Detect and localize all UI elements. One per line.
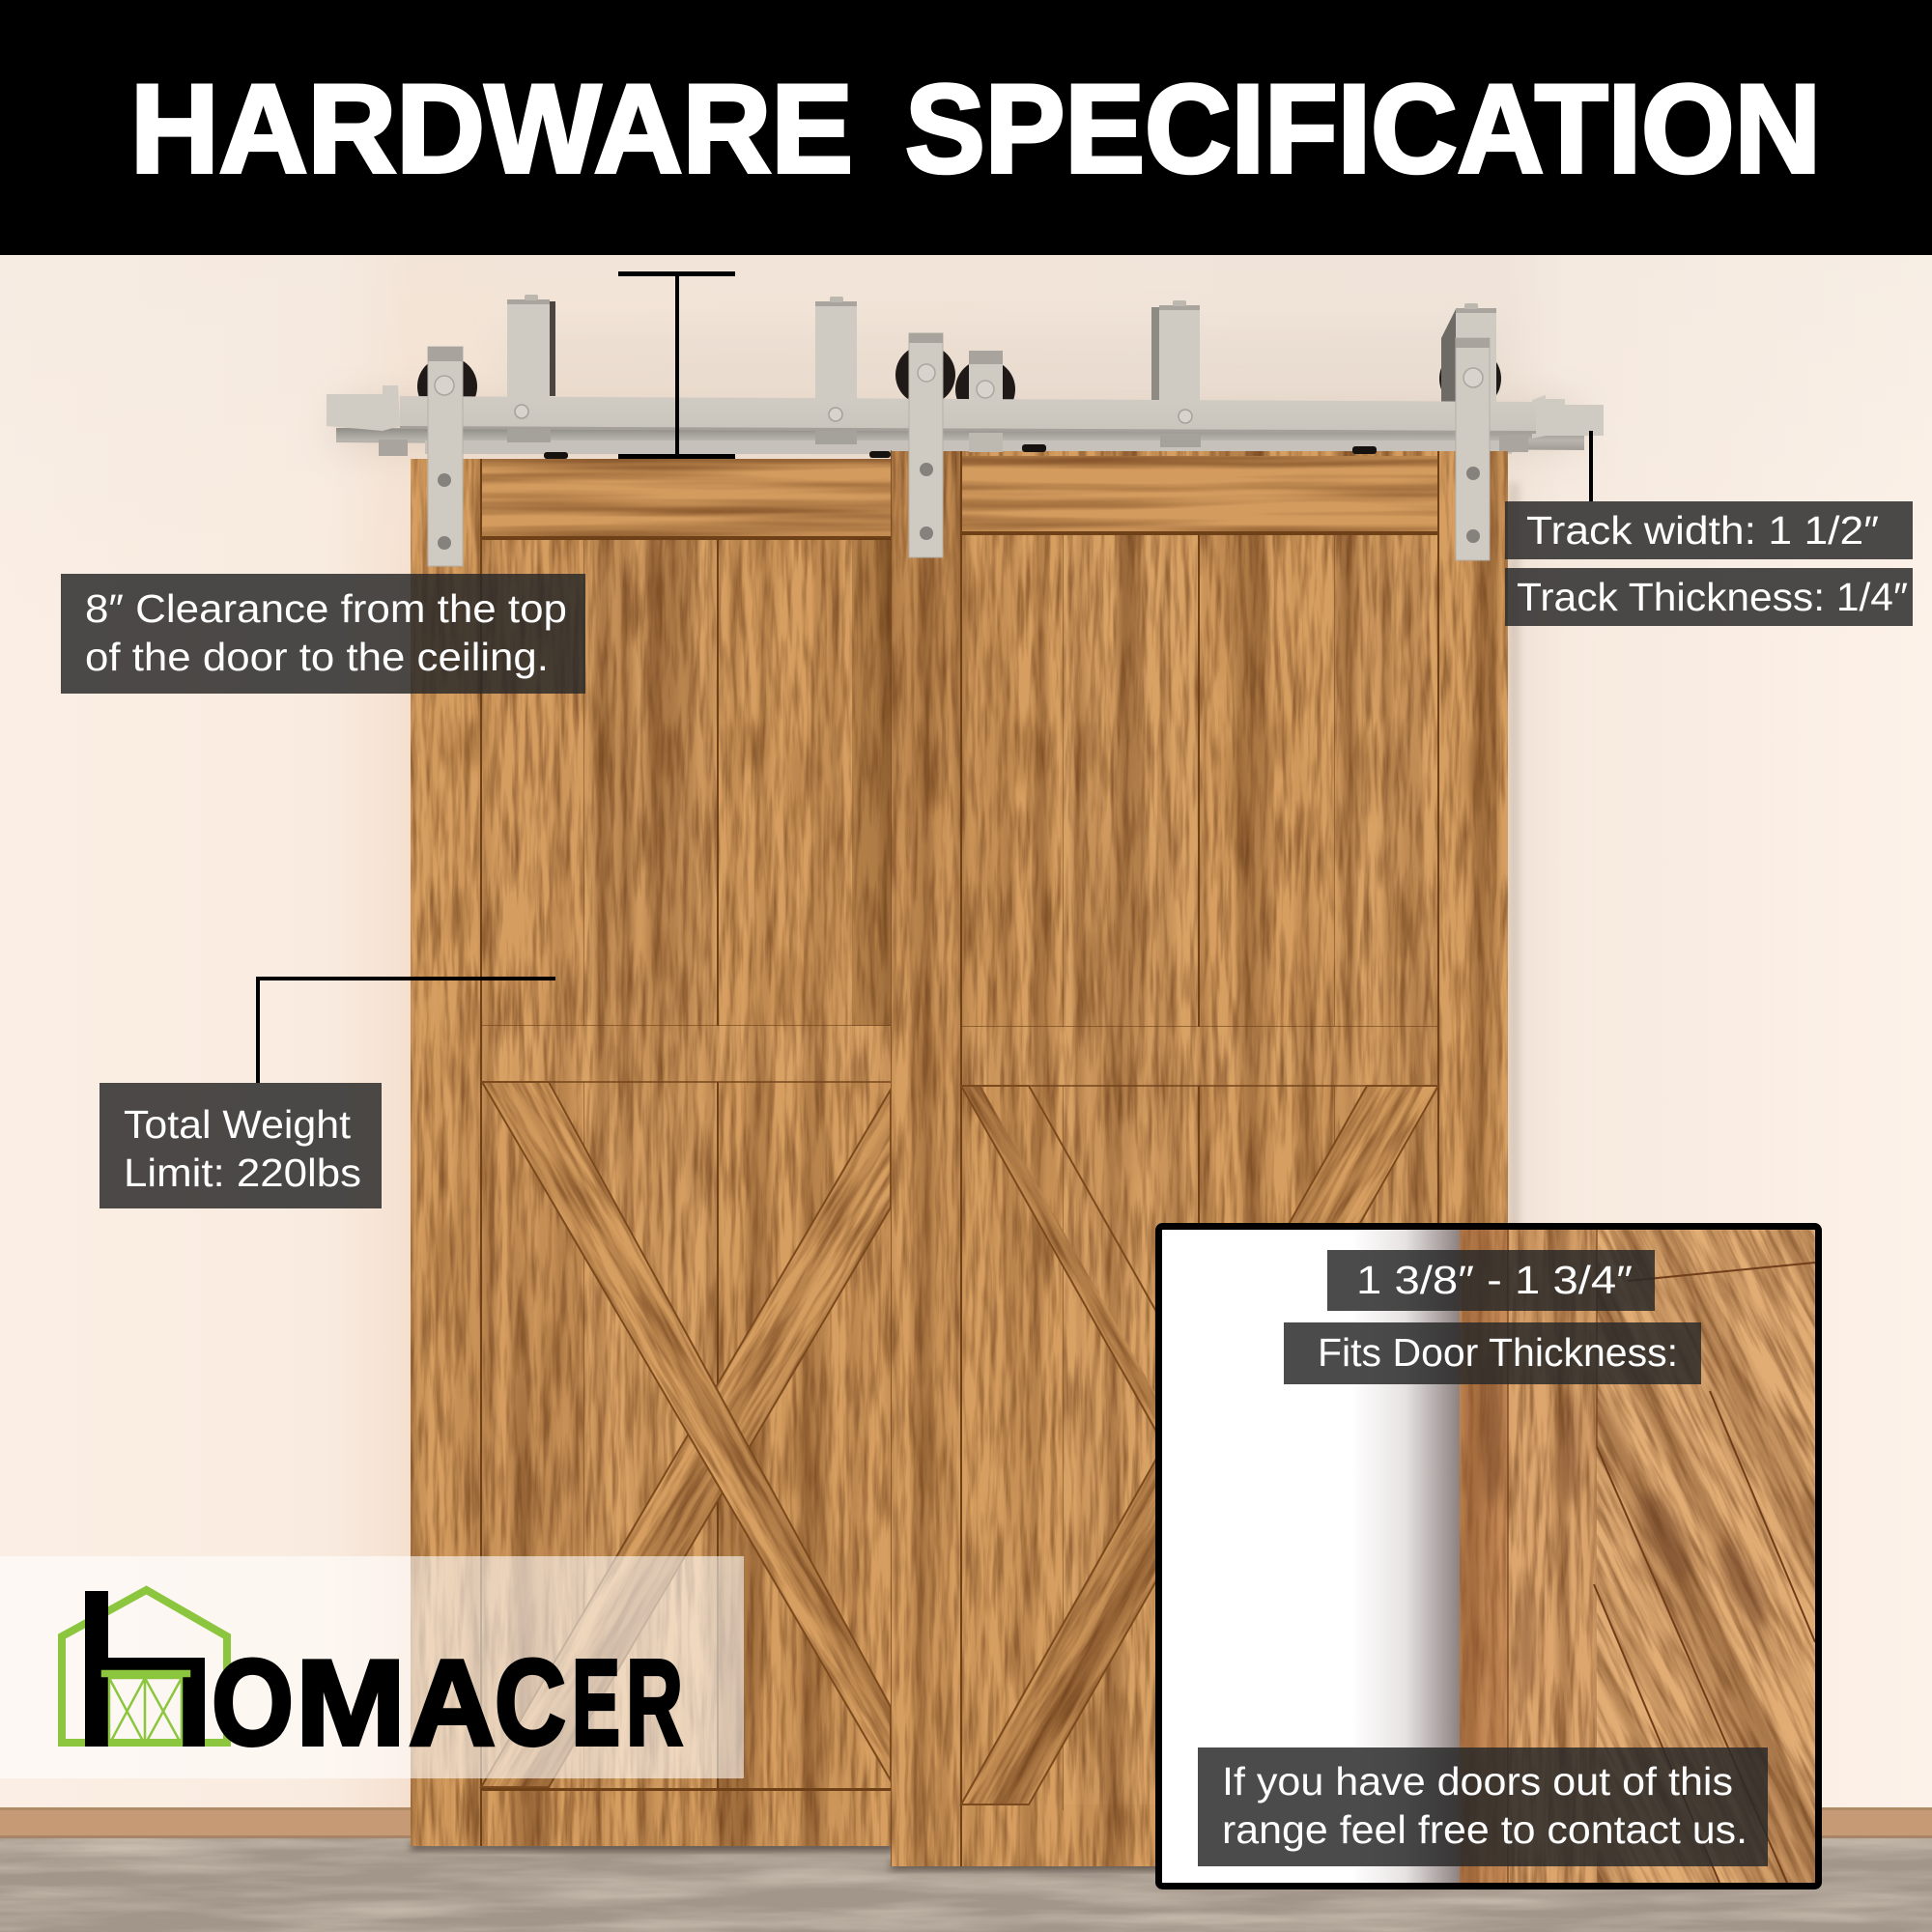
callout: clearance: 8″ Clearance from the top bbox=[85, 586, 567, 631]
door seams bbox=[480, 459, 892, 1846]
logo band bbox=[0, 1556, 744, 1778]
logo wordmark: E bbox=[572, 1634, 620, 1771]
header band bbox=[0, 0, 1932, 255]
clearance dimension marker bbox=[618, 271, 735, 459]
panel wood side bbox=[1460, 1230, 1815, 1883]
logo wordmark bbox=[212, 1634, 683, 1771]
weight leader line bbox=[258, 979, 555, 1083]
panel white side with shadow bbox=[1159, 1227, 1460, 1886]
door knots bbox=[435, 710, 806, 1536]
left barn door bbox=[406, 459, 891, 1855]
door knots bbox=[918, 717, 1483, 1497]
strap 1 bbox=[428, 347, 463, 566]
door top rail bbox=[960, 456, 1438, 533]
callout: track width bbox=[1505, 501, 1913, 559]
door top rail bbox=[481, 459, 892, 538]
callout: contact note: If you have doors out of this bbox=[1222, 1759, 1733, 1804]
track bbox=[400, 396, 1536, 432]
callout: weight limit: Limit: 220lbs bbox=[124, 1151, 361, 1195]
title: HARDWARE bbox=[130, 58, 853, 199]
door planks bbox=[411, 459, 894, 1846]
callout: thickness range: 1 3/8″ - 1 3/4″ bbox=[1356, 1258, 1633, 1302]
right barn door bbox=[810, 450, 1520, 1869]
hardware front: hanger straps with bolts bbox=[428, 333, 1490, 566]
logo wordmark: O bbox=[212, 1634, 294, 1771]
floor bbox=[0, 1838, 1932, 1932]
door planks bbox=[891, 451, 1508, 1866]
bracket clamps bbox=[507, 429, 1201, 447]
door seams bbox=[891, 450, 1439, 1866]
strap 3 bbox=[969, 351, 1003, 452]
track width leader line bbox=[1589, 431, 1593, 501]
hardware back: rail, wheels and upper brackets bbox=[327, 295, 1604, 456]
track bolts bbox=[515, 405, 1192, 423]
baseboard bbox=[0, 1807, 1932, 1839]
strap 2 bbox=[909, 333, 943, 557]
logo wordmark: C bbox=[495, 1634, 566, 1771]
panel border bbox=[1159, 1227, 1818, 1886]
callout: clearance bbox=[61, 574, 585, 694]
door shadow on floor bbox=[411, 1843, 894, 1850]
end caps bbox=[327, 385, 400, 431]
door X brace bbox=[479, 1081, 891, 1788]
callout: contact note bbox=[1198, 1747, 1768, 1866]
callout: track thickness: Track Thickness: 1/4″ bbox=[1517, 575, 1908, 619]
strap 4 bbox=[1456, 338, 1490, 560]
icon: barn door bbox=[102, 1671, 189, 1745]
callout: clearance: of the door to the ceiling. bbox=[85, 635, 549, 679]
callout: track width: Track width: 1 1/2″ bbox=[1526, 508, 1879, 553]
callout: thickness range bbox=[1327, 1250, 1655, 1311]
door stops bbox=[544, 444, 1377, 459]
icon: green house bbox=[62, 1590, 227, 1743]
shade along right edge bbox=[852, 538, 892, 1026]
logo wordmark: A bbox=[409, 1634, 496, 1771]
icon: black H bbox=[85, 1591, 205, 1747]
callout: contact note: range feel free to contact us. bbox=[1222, 1807, 1747, 1852]
logo: Homacer bbox=[62, 1590, 683, 1771]
logo wordmark: M bbox=[296, 1634, 406, 1771]
logo wordmark: R bbox=[626, 1634, 683, 1771]
callout: fits door thickness bbox=[1284, 1322, 1701, 1384]
door X brace bbox=[959, 1085, 1440, 1805]
lower rail bbox=[336, 428, 1584, 450]
upper brackets bbox=[507, 295, 1496, 402]
callout: weight limit bbox=[99, 1083, 382, 1208]
inset panel: door thickness detail bbox=[1155, 1223, 1822, 1889]
callout: weight limit: Total Weight bbox=[124, 1102, 352, 1147]
wheels bbox=[417, 345, 1501, 419]
title: SPECIFICATION bbox=[905, 58, 1821, 199]
title bbox=[130, 58, 1821, 199]
callout: fits door thickness: Fits Door Thickness: bbox=[1318, 1330, 1678, 1375]
